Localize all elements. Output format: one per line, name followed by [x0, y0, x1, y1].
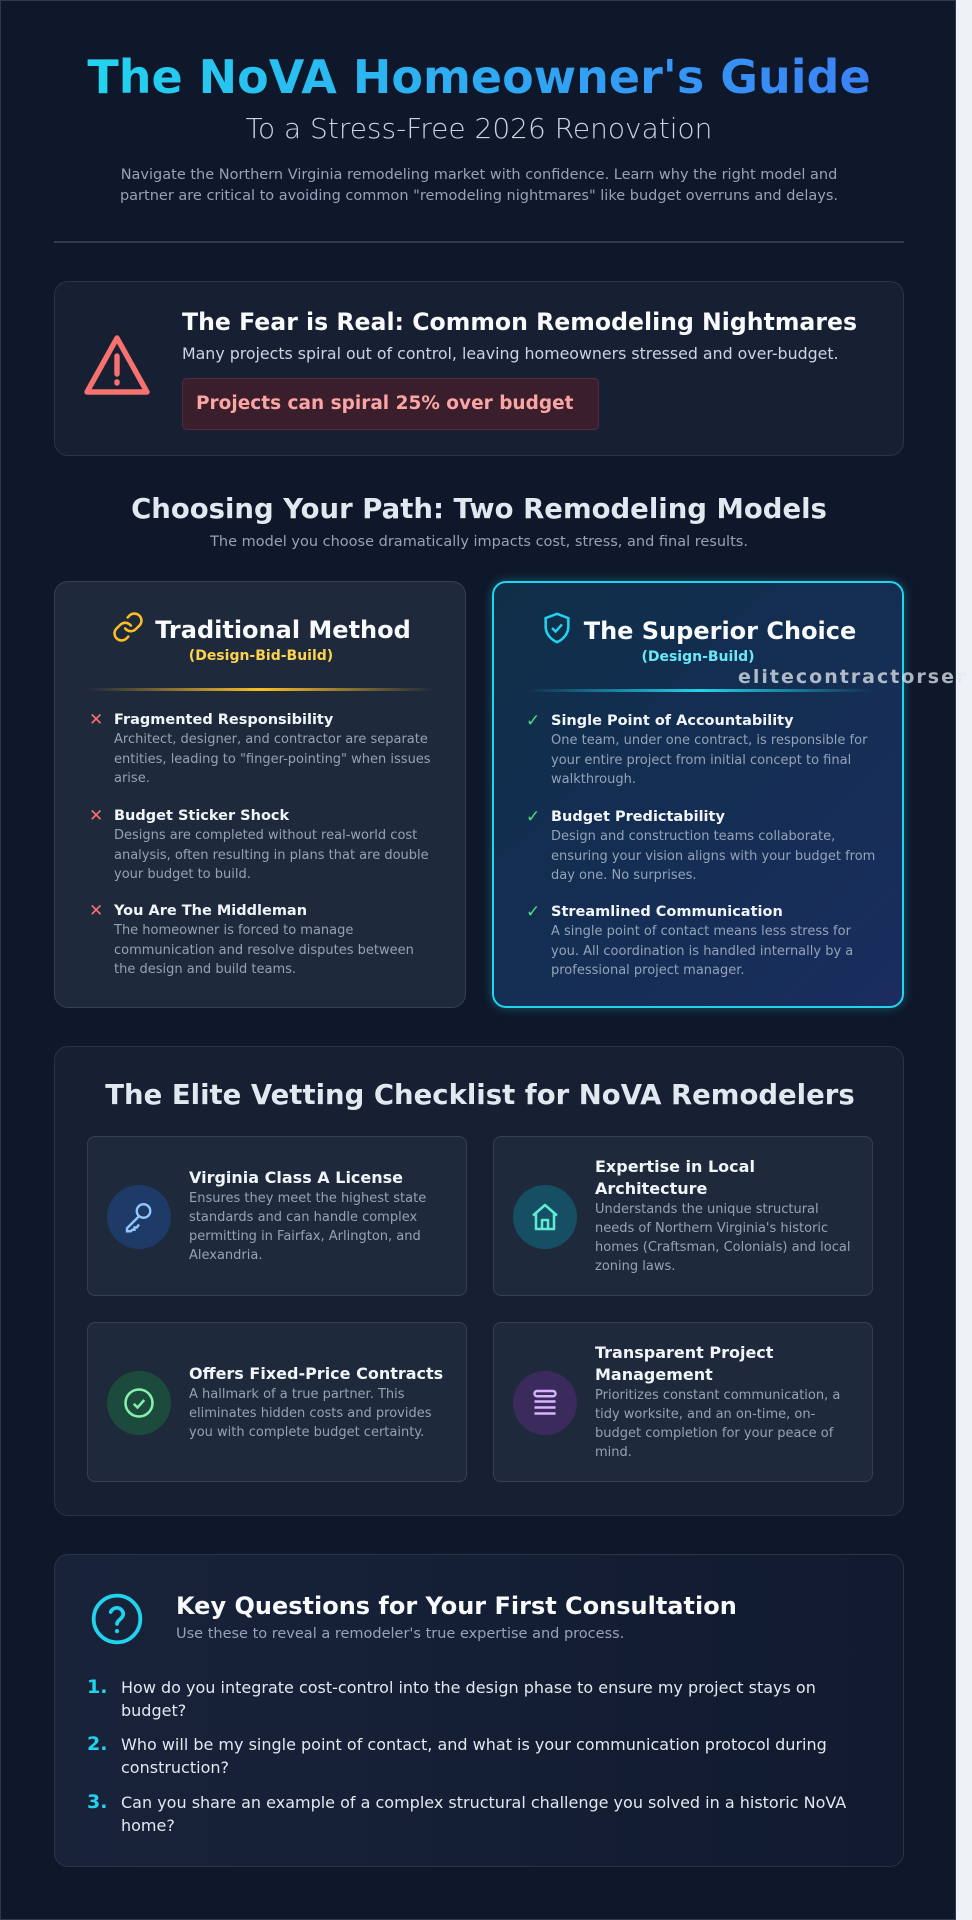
item: license: Ensures they meet the highest state standards and can handle complex permitting in Fairfax, Arlington, and Alexandria.	[189, 1191, 426, 1263]
icon: check circle	[107, 1371, 171, 1435]
subheading: Use these to reveal a remodeler's true expertise and process.	[176, 1626, 624, 1642]
item: fixed price: A hallmark of a true partner. This eliminates hidden costs and provides you with complete budget certainty.	[189, 1386, 432, 1440]
card title: Traditional Method	[155, 616, 411, 644]
callout: 25%	[182, 378, 599, 430]
subtitle: To a Stress-Free 2026 Renovation	[246, 112, 712, 145]
panel: fear	[54, 281, 904, 456]
list: drawbacks: The homeowner is forced to manage communication and resolve disputes between the design and build teams.	[114, 923, 414, 977]
item: architecture: Understands the unique structural needs of Northern Virginia's historic homes (Craftsman, Colonials) and local zoning laws.	[595, 1202, 850, 1274]
icon: list	[513, 1371, 577, 1435]
list: drawbacks: Architect, designer, and contractor are separate entities, leading to "finger-pointing" when issues arise.	[114, 732, 431, 786]
item: license: Virginia Class A License	[189, 1168, 403, 1187]
callout: 25%: Projects can spiral 25% over budget	[196, 393, 573, 414]
question list	[87, 1676, 846, 1835]
list: drawbacks	[89, 710, 431, 977]
list: benefits	[526, 711, 875, 978]
icon: house	[513, 1185, 577, 1249]
list: benefits: Single Point of Accountability	[551, 713, 794, 729]
list: drawbacks: ✕	[89, 806, 103, 826]
question list: 1.	[87, 1676, 107, 1698]
card title: The Superior Choice	[584, 617, 856, 645]
panel: design-build	[492, 581, 904, 1008]
heading: The Fear is Real: Common Remodeling Nightmares	[182, 308, 857, 336]
list: benefits: Budget Predictability	[551, 809, 725, 825]
question list: How do you integrate cost-control into the design phase to ensure my project stays on budget?	[121, 1678, 816, 1720]
item: fixed price	[87, 1322, 467, 1482]
panel: checklist	[54, 1046, 904, 1516]
list: drawbacks: Fragmented Responsibility	[114, 712, 333, 728]
item: architecture: Expertise in Local Architecture	[595, 1157, 755, 1198]
list: benefits: One team, under one contract, is responsible for your entire project from initial concept to final walkthrough.	[551, 733, 867, 787]
heading: models: Choosing Your Path: Two Remodeling Models	[131, 493, 827, 525]
subheading: The model you choose dramatically impacts cost, stress, and final results.	[210, 534, 748, 550]
list: benefits: A single point of contact means less stress for you. All coordination is handled internally by a professional project manager.	[551, 924, 853, 978]
icon: key	[107, 1185, 171, 1249]
list: drawbacks: ✕	[89, 901, 103, 921]
list: benefits: Streamlined Communication	[551, 904, 783, 920]
item: architecture	[493, 1136, 873, 1296]
intro text: Navigate the Northern Virginia remodeling market with confidence. Learn why the right model and partner are critical to avoiding common "remodeling nightmares" like budget overruns and delays.	[120, 167, 838, 204]
title: The NoVA Homeowner's Guide	[87, 50, 871, 104]
list: benefits: Design and construction teams collaborate, ensuring your vision aligns with your budget from day one. No surprises.	[551, 829, 875, 883]
list: benefits: ✓	[526, 807, 540, 827]
item: transparency	[493, 1322, 873, 1482]
question list: 2.	[87, 1733, 107, 1755]
panel: questions	[54, 1554, 904, 1867]
list: benefits: ✓	[526, 711, 540, 731]
panel: traditional: (Design-Bid-Build)	[189, 648, 333, 664]
text: Many projects spiral out of control, leaving homeowners stressed and over-budget.	[182, 344, 839, 363]
panel: design-build: (Design-Build)	[641, 649, 755, 665]
list: drawbacks: Budget Sticker Shock	[114, 808, 289, 824]
watermark: elitecontractorser	[738, 666, 967, 688]
icon: question	[92, 1594, 142, 1644]
item: transparency: Prioritizes constant communication, a tidy worksite, and an on-time, on-budget completion for your peace of mind.	[595, 1388, 840, 1460]
icon: warning	[84, 335, 150, 395]
list: drawbacks: ✕	[89, 710, 103, 730]
list: benefits: ✓	[526, 902, 540, 922]
question list: Who will be my single point of contact, and what is your communication protocol during construction?	[121, 1735, 827, 1777]
item: transparency: Transparent Project Management	[595, 1343, 773, 1384]
question list: 3.	[87, 1791, 107, 1813]
heading: The Elite Vetting Checklist for NoVA Remodelers	[105, 1079, 855, 1111]
item: fixed price: Offers Fixed-Price Contracts	[189, 1364, 443, 1382]
panel: traditional	[54, 581, 466, 1008]
heading: Key Questions for Your First Consultation	[176, 1592, 737, 1620]
list: drawbacks: You Are The Middleman	[114, 903, 307, 919]
question list: Can you share an example of a complex structural challenge you solved in a historic NoVA home?	[121, 1793, 846, 1835]
item: license	[87, 1136, 467, 1296]
list: drawbacks: Designs are completed without real-world cost analysis, often resulting in plans that are double your budget to build.	[114, 828, 429, 882]
